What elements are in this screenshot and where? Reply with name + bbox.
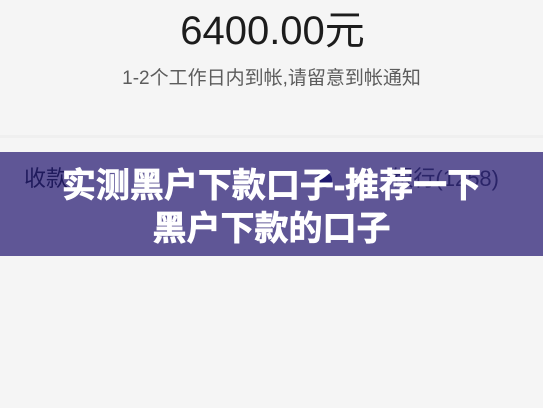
background label: bank account: 银行(1258) [391,166,499,191]
icon: bank logo [316,172,332,188]
background label: payee: 收款 [24,166,68,191]
amount: 6400.00 yuan: 6400.00元 [180,9,365,53]
divider band [0,135,543,138]
notice: arrival time: 1-2个工作日内到帐,请留意到帐通知 [122,68,421,89]
banner [0,152,543,256]
banner title [62,167,481,248]
banner title: 黑户下款的口子 [152,210,390,248]
banner title: 实测黑户下款口子-推荐一下 [62,167,481,205]
